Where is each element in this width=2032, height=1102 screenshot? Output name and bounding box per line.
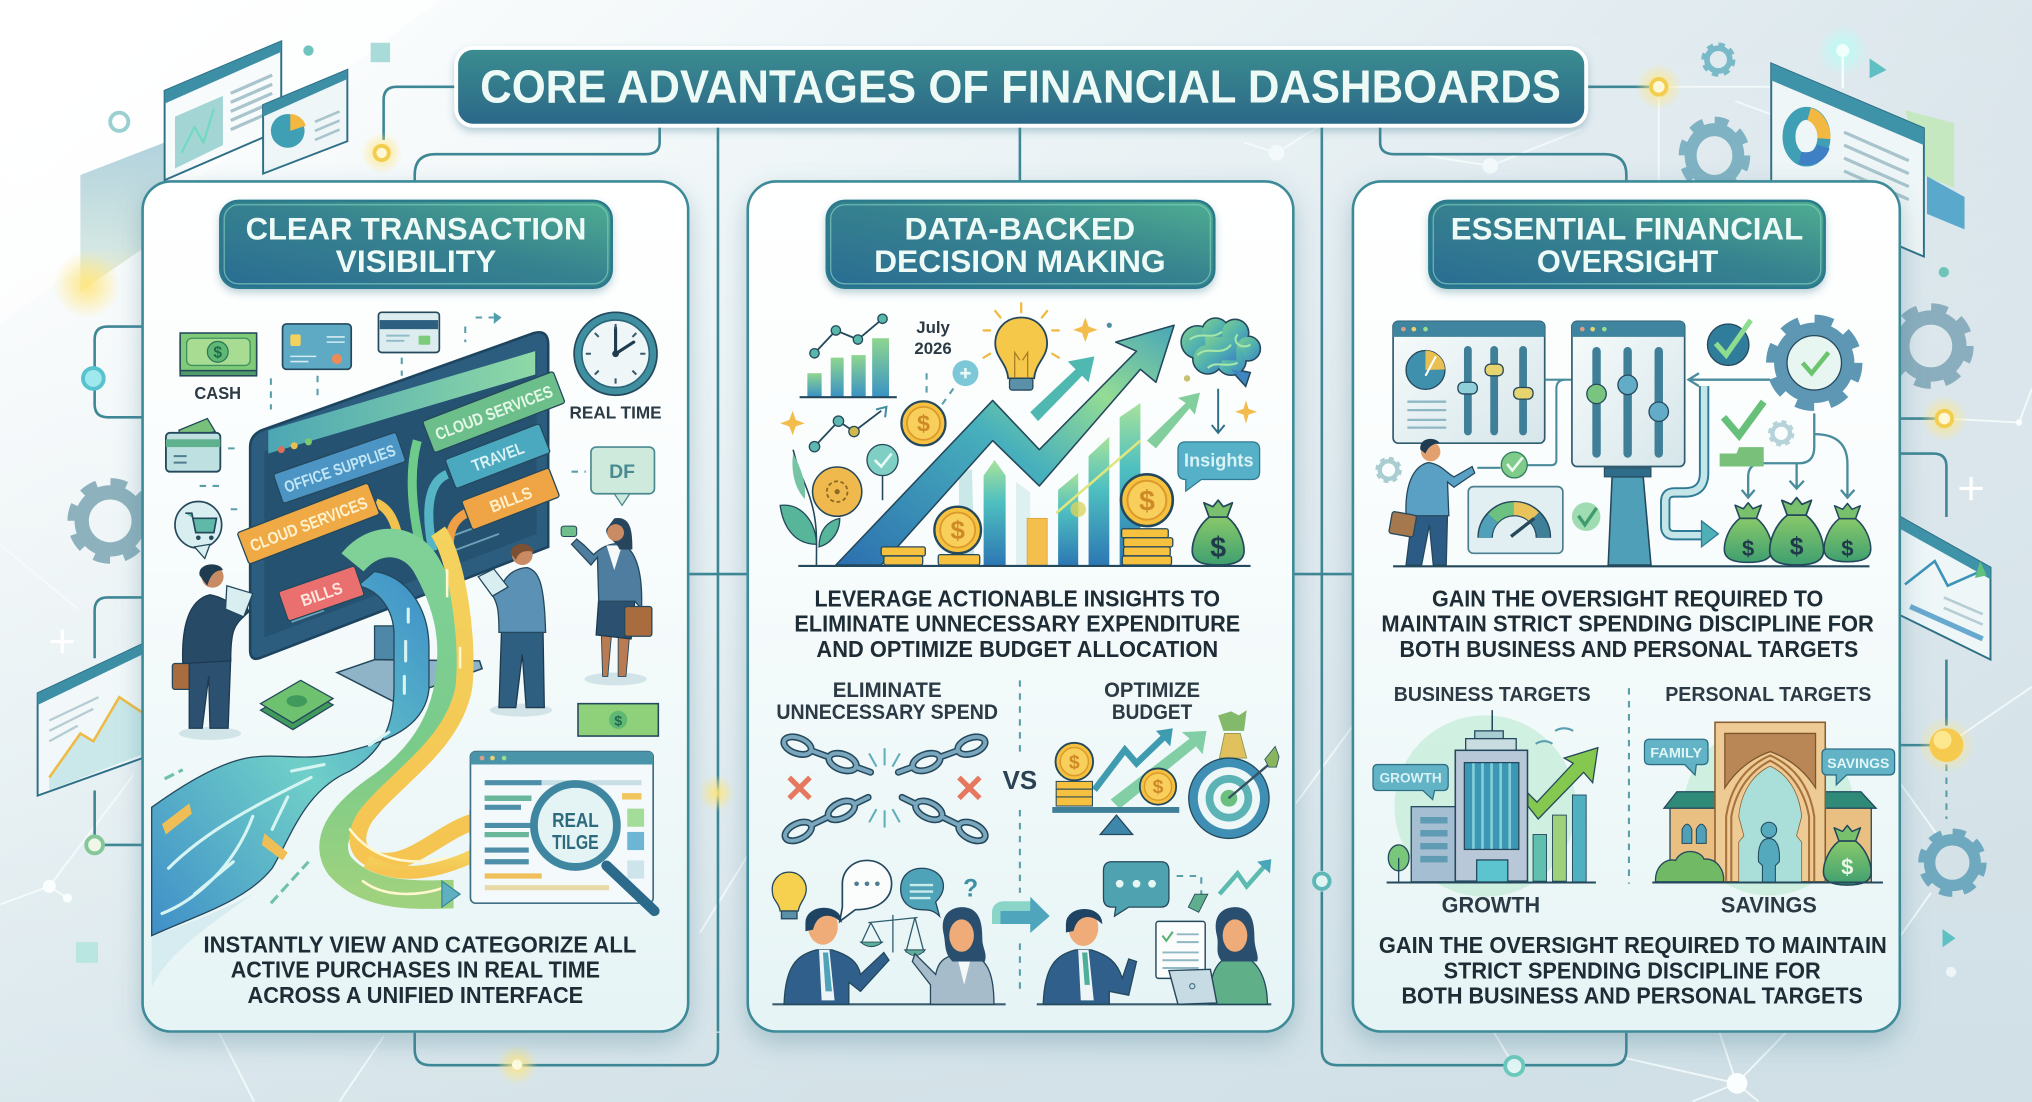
description text [794,585,1240,662]
small line chart [809,407,886,452]
description text: BOTH BUSINESS AND PERSONAL TARGETS [1400,636,1858,662]
heading: business targets: BUSINESS TARGETS [1394,683,1591,706]
icon: money bags: $ [1790,534,1804,561]
person: operator [1389,439,1475,565]
closing description text: STRICT SPENDING DISCIPLINE FOR [1444,957,1821,983]
heading: data-backed decision making: DECISION MAKING [874,244,1166,279]
icon: banknote [578,704,658,736]
coins and stacks: $ [1139,486,1155,518]
description text: MAINTAIN STRICT SPENDING DISCIPLINE FOR [1381,611,1874,637]
icon: lower-right gear [1923,833,1982,892]
vs label: VS [1003,767,1037,795]
date label [914,318,952,358]
description text [1381,585,1874,662]
heading: clear transaction visibility: VISIBILITY [336,244,497,279]
scene: personal savings with archway [1644,722,1895,895]
icon: small network node [927,360,978,404]
category label: office supplies: OFFICE SUPPLIES [282,442,398,497]
insights bubble [1178,442,1260,491]
icon: plant [780,450,840,565]
category label: cloud services orange: CLOUD SERVICES [247,493,370,556]
monitor [250,332,548,701]
icon: green check [1501,452,1527,478]
coins and stacks: $ [950,517,965,545]
icon: light bulb [984,303,1059,390]
icon: wallet [166,419,220,472]
date label: July [916,318,951,337]
person: man with tablet [172,564,253,740]
gauge panel [1468,487,1563,553]
description text: ACROSS A UNIFIED INTERFACE [248,982,583,1008]
description text [203,931,636,1008]
comparison heading: eliminate unnecessary spend: UNNECESSARY SPEND [776,700,998,724]
description text: ELIMINATE UNNECESSARY EXPENDITURE [794,611,1240,637]
label: real time: REAL TIME [570,403,662,423]
icon: cash note: $ [213,345,222,362]
heading: essential financial oversight: OVERSIGHT [1537,244,1718,279]
window: purchase list with magnifier: TILGE [552,832,599,854]
icon: top-right donut chart window [1771,63,1924,257]
icon: small top gear [1704,45,1733,74]
icon: broken chains [781,733,988,845]
category label: bills orange [461,468,560,530]
icon: money bags: $ [1841,536,1854,561]
icon: clock [574,312,657,395]
icon: shopping cart bubble [175,501,222,559]
date label: 2026 [914,339,952,358]
icon: banknote: $ [614,714,622,730]
category label: bills red [278,566,364,621]
icon: teal card [283,324,351,369]
heading: personal targets: PERSONAL TARGETS [1665,683,1871,706]
title banner [456,48,1586,126]
icon: document speech bubble: DF [609,461,635,483]
heading: clear transaction visibility [220,201,612,288]
decoration: top-right ribbons [1905,110,1965,229]
title banner: CORE ADVANTAGES OF FINANCIAL DASHBOARDS [480,60,1561,112]
icon: top-left pie chart window [263,70,347,174]
arrow between scenes [998,897,1050,933]
window: control sliders on stand [1572,321,1685,565]
panel: clear transaction visibility [143,181,688,1032]
coins and stacks: $ [917,411,930,437]
icon: money bags [1724,498,1871,565]
heading: data-backed decision making [827,201,1214,288]
heading: clear transaction visibility: CLEAR TRANSACTION [246,212,586,247]
icon: left gear [73,484,147,558]
closing description text: GAIN THE OVERSIGHT REQUIRED TO MAINTAIN [1379,932,1887,958]
thick flow arrow [1665,386,1718,547]
comparison heading: optimize budget: BUDGET [1112,700,1192,724]
icon: money bags: $ [1742,536,1754,561]
chart bars [959,403,1140,565]
icon: small gear left [1377,459,1400,481]
label: cash: CASH [194,383,241,403]
icon: gear with check [1772,321,1856,405]
description text: ACTIVE PURCHASES IN REAL TIME [231,957,600,983]
icon: budget balance and arrows: $ [1069,751,1080,773]
closing description text [1379,932,1887,1009]
scene baseline [1393,565,1869,567]
window: purchase list with magnifier [470,752,654,911]
scene: personal savings with archway: $ [1841,855,1853,880]
scene: personal savings with archway: SAVINGS [1827,756,1889,772]
category label: bills orange: BILLS [487,483,535,517]
category label: cloud services green: CLOUD SERVICES [433,382,556,444]
icon: small gear [1770,422,1793,445]
person: man at monitor [478,544,552,717]
window: purchase list with magnifier: REAL [552,810,599,832]
panel: data-backed decision making [748,181,1293,1032]
icon: money bag [1192,500,1244,565]
check circle [867,444,898,500]
heading: data-backed decision making: DATA-BACKED [905,212,1135,247]
chart baseline [798,565,1251,567]
scene: business growth: GROWTH [1379,771,1442,787]
icon: brain [1182,319,1260,385]
icon: cash note [180,333,257,376]
label: savings: SAVINGS [1721,892,1817,917]
scene: presentation and planning [1037,859,1271,1004]
icon: green tick [1724,402,1764,435]
icon: budget balance and arrows [1052,728,1206,835]
bar chart icon [800,314,897,397]
icon: small check [1572,502,1600,531]
icon: check badge [1707,320,1751,365]
connectors [1477,373,1854,498]
icon: right chart window [1900,517,1990,660]
secondary arrows [1030,356,1200,517]
sparkles [780,317,1257,435]
dashed arrow [200,312,502,509]
comparison heading: eliminate unnecessary spend: ELIMINATE [833,678,942,702]
icon: red crosses [789,778,980,798]
label: growth: GROWTH [1442,892,1540,917]
scene: personal savings with archway: FAMILY [1650,745,1703,761]
scene: discussion with scales [772,860,1006,1004]
large growth arrow [836,325,1174,565]
closing description text: BOTH BUSINESS AND PERSONAL TARGETS [1402,983,1863,1009]
icon: light card [378,312,439,352]
icon: cash stack [261,680,333,730]
vertical divider [1628,688,1630,884]
heading: essential financial oversight [1429,201,1825,288]
category label: bills red: BILLS [298,578,345,610]
icon: lower-left chart window [38,644,143,796]
heading: essential financial oversight: ESSENTIAL FINANCIAL [1451,212,1803,247]
window: gauge and sliders [1393,321,1545,443]
icon: document speech bubble [572,447,654,505]
panel: essential financial oversight [1353,181,1900,1032]
comparison heading: optimize budget [1104,678,1200,724]
category label: travel [445,424,550,489]
icon: target with bag [1189,710,1279,838]
coins and stacks [881,401,1173,565]
insights bubble: Insights [1184,451,1254,471]
description text: AND OPTIMIZE BUDGET ALLOCATION [816,636,1218,662]
comparison heading: eliminate unnecessary spend [776,678,998,724]
icon: money bag: $ [1210,532,1226,564]
data stream ribbons [152,441,486,987]
category label: travel: TRAVEL [469,438,527,476]
description text: LEVERAGE ACTIONABLE INSIGHTS TO [814,585,1220,611]
decoration: top-left slanted panel [80,143,165,292]
vertical divider [1019,680,1021,990]
description text: GAIN THE OVERSIGHT REQUIRED TO [1432,585,1823,611]
scene: business growth [1373,710,1598,897]
icon: right gear [1894,309,1968,383]
person: woman with briefcase [561,518,652,686]
icon: banknotes [1720,447,1764,467]
icon: top-left document window [165,41,281,180]
icon: top-right gear [1683,122,1745,189]
down arrow [1212,389,1225,433]
description text: INSTANTLY VIEW AND CATEGORIZE ALL [203,931,636,957]
scene: discussion with scales: ? [963,876,978,903]
icon: budget balance and arrows: $ [1153,776,1164,798]
icon: orange target coin [813,467,862,516]
comparison heading: optimize budget: OPTIMIZE [1104,678,1200,702]
